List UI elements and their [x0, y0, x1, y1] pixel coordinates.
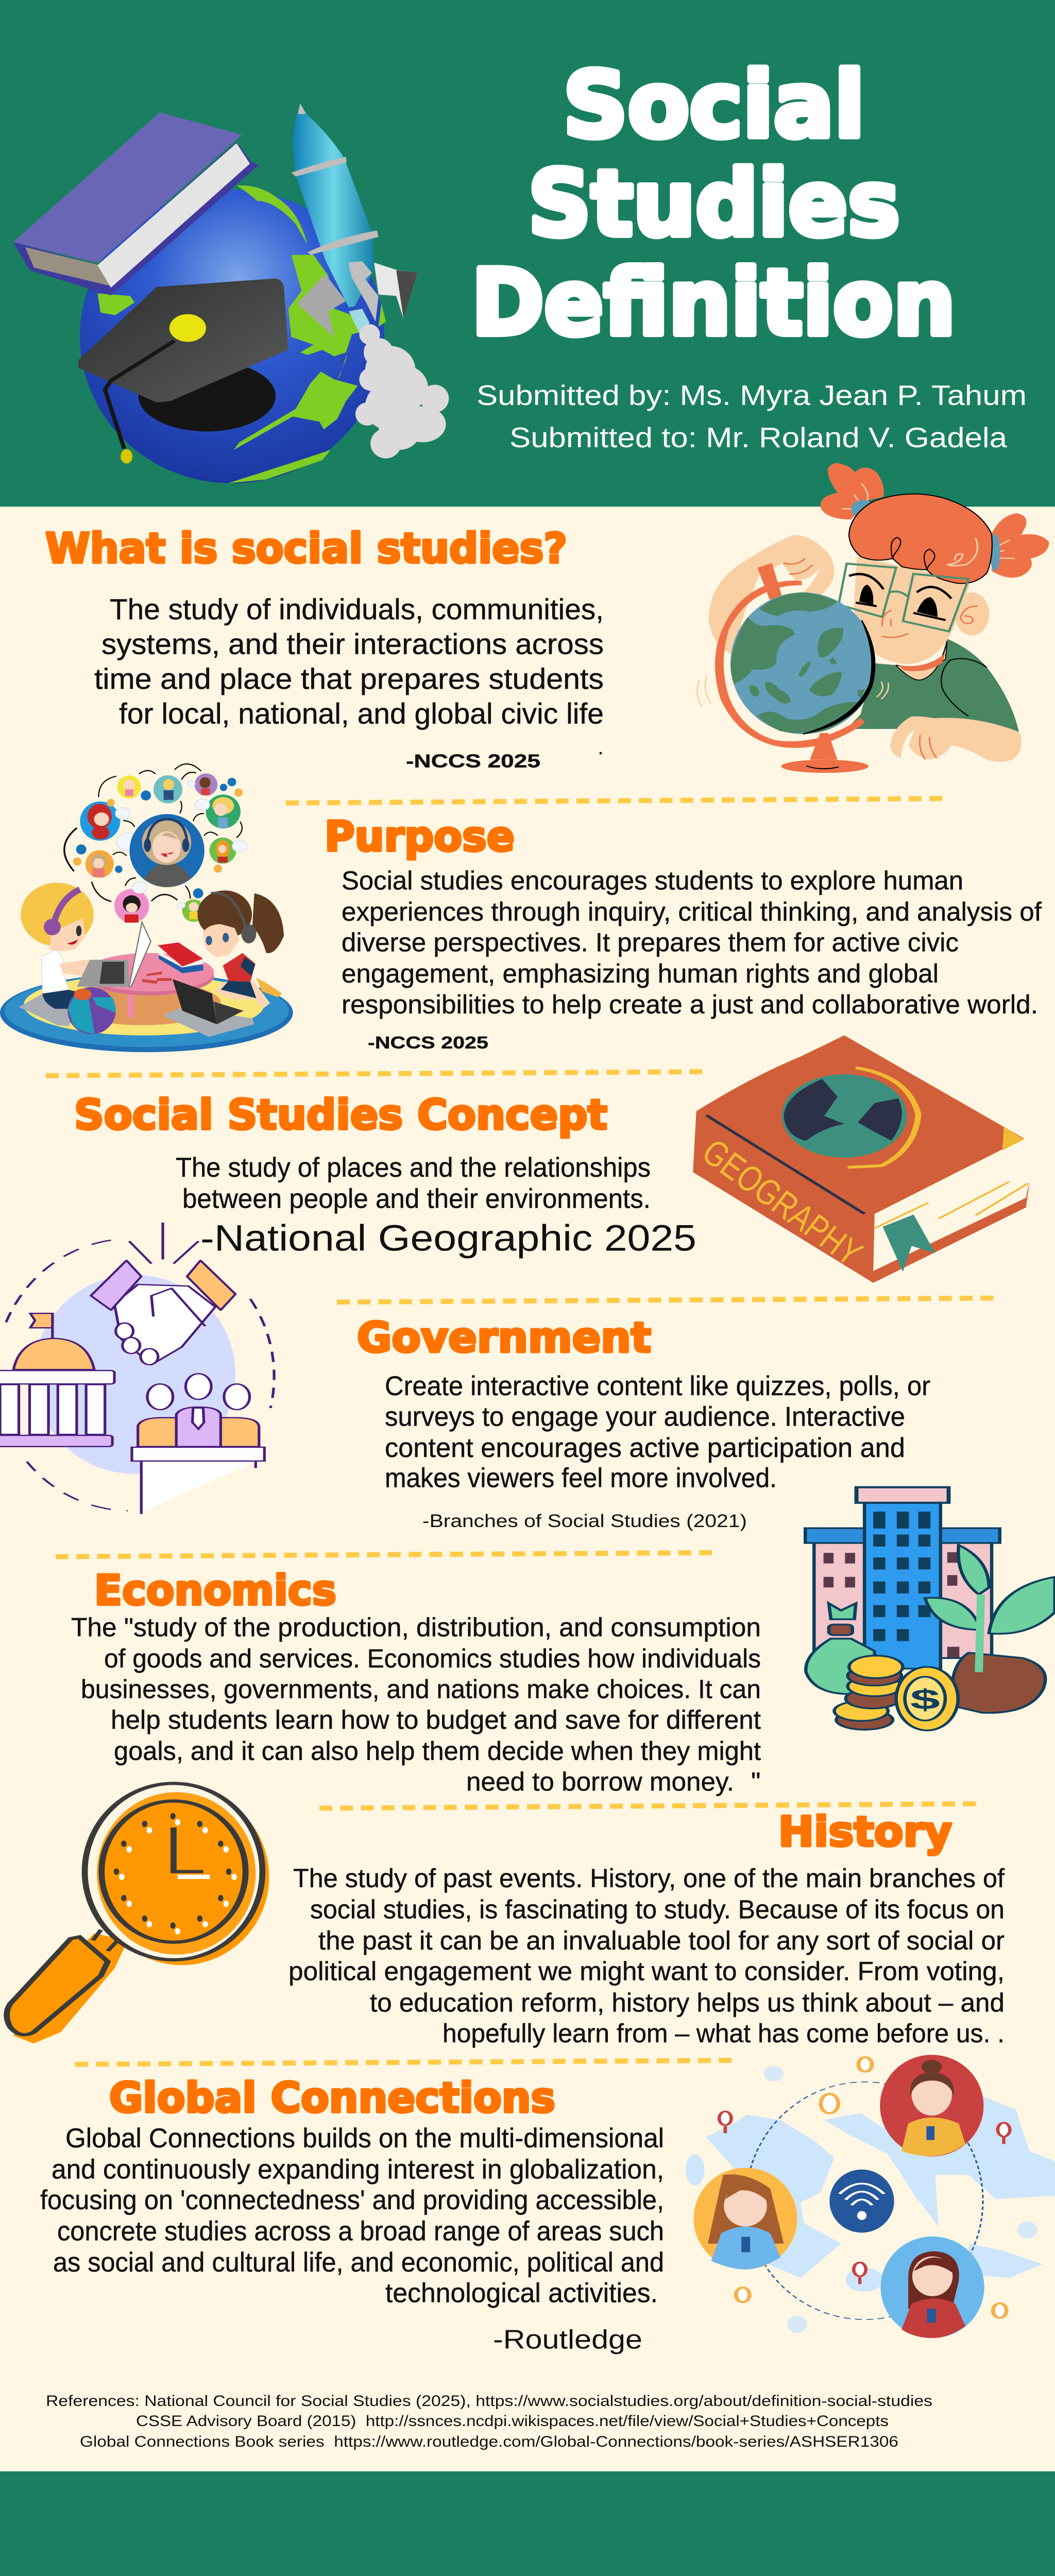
citation: -Routledge: [493, 2325, 642, 2354]
heading: What is social studies?: [45, 525, 567, 573]
mat: [0, 973, 293, 1052]
body text: need to borrow money.: [466, 1767, 734, 1796]
clock hands: [178, 1874, 210, 1880]
dashed ring: [4, 1240, 274, 1511]
body text: businesses, governments, and nations make choices. It can: [81, 1674, 761, 1704]
body text: [342, 866, 1042, 1019]
body text: Social studies encourages students to explore human: [342, 866, 963, 895]
heading: Social Studies Concept: [74, 1091, 607, 1139]
body text: responsibilities to help create a just and collaborative world.: [342, 989, 1038, 1019]
body text: Create interactive content like quizzes, polls, or: [385, 1371, 930, 1401]
illustration: city buildings, money and plant: $: [910, 1684, 940, 1715]
shirt: [847, 638, 1019, 733]
body text: The study of individuals, communities,: [110, 594, 604, 626]
section: what is social studies: [45, 525, 604, 771]
body text: [94, 594, 604, 730]
dashed connection ring: [746, 2082, 983, 2319]
body text: diverse perspectives. It prepares them for active civic: [342, 927, 959, 957]
body text: hopefully learn from – what has come before us. .: [443, 2018, 1005, 2048]
submitted by lines: [477, 380, 1027, 453]
book: [13, 112, 259, 295]
body text: [40, 2124, 664, 2309]
body text: [385, 1371, 930, 1494]
title: [471, 53, 956, 355]
hearts: [736, 2057, 1007, 2318]
globe stand: [715, 581, 865, 748]
money bag: [806, 1603, 875, 1694]
body text: experiences through inquiry, critical thinking, and analysis of: [342, 897, 1042, 926]
title: Studies: [528, 151, 900, 257]
world map: [686, 2066, 1055, 2333]
face: [854, 556, 969, 664]
body text: systems, and their interactions across: [101, 628, 604, 660]
boy: [19, 883, 151, 1026]
body text: and continuously expanding interest in globalization,: [52, 2155, 664, 2184]
body text: time and place that prepares students: [94, 663, 604, 696]
footer band: [0, 2471, 1055, 2576]
heading: History: [778, 1808, 952, 1856]
boy laptop: [77, 960, 129, 987]
section: purpose: [325, 813, 1042, 1053]
body text: surveys to engage your audience. Interactive: [385, 1402, 905, 1432]
section: history: [288, 1808, 1005, 2048]
books on table: [159, 955, 203, 973]
submitted by lines: Submitted to: Mr. Roland V. Gadela: [509, 422, 1007, 453]
references: CSSE Advisory Board (2015) http://ssnces.ncdpi.wikispaces.net/file/view/Social+Studies+Concepts: [136, 2413, 889, 2430]
body text: between people and their environments.: [182, 1184, 651, 1214]
globe ball: [730, 592, 875, 734]
heading: Economics: [94, 1567, 336, 1615]
person: red circle: [880, 2055, 983, 2157]
illustration: globe, book, graduation cap and rocket: [13, 104, 449, 483]
body text: engagement, emphasizing human rights and global: [342, 959, 939, 988]
body text: help students learn how to budget and save for different: [111, 1705, 761, 1734]
hair tufts: [821, 463, 884, 519]
body text: [71, 1612, 761, 1796]
body text: goals, and it can also help them decide when they might: [114, 1736, 761, 1766]
girl: [163, 890, 284, 1037]
body text: technological activities.: [385, 2278, 658, 2309]
illustration: geography book: [693, 1036, 1029, 1283]
body text: The "study of the production, distribution, and consumption: [71, 1612, 761, 1642]
body text: ": [751, 1767, 760, 1796]
body text: [288, 1863, 1005, 2048]
coins: [834, 1655, 958, 1731]
body text: content encourages active participation and: [385, 1433, 905, 1463]
body text: [176, 1153, 651, 1214]
references: Global Connections Book series https://www.routledge.com/Global-Connections/book-series/ASHSER1306: [80, 2433, 898, 2450]
body text: the past it can be an invaluable tool for any sort of social or: [318, 1926, 1005, 1955]
illustration: city buildings, money and plant: [805, 1487, 1055, 1731]
illustration: children video chatting: [0, 764, 293, 1052]
body text: focusing on 'connectedness' and providing accessible,: [40, 2185, 664, 2215]
map pins: [719, 2111, 1010, 2284]
body text: concrete studies across a broad range of areas such: [57, 2216, 664, 2246]
glasses: [839, 564, 968, 632]
heading: Government: [357, 1314, 651, 1362]
citation: -NCCS 2025: [368, 1034, 488, 1053]
section: global connections: [40, 2074, 664, 2354]
graduation cap: [78, 278, 288, 464]
section: social studies concept: [74, 1091, 696, 1259]
illustration: global connections network: [686, 2055, 1055, 2338]
body text: social studies, is fascinating to study. Because of its focus on: [310, 1894, 1005, 1924]
body text: The study of past events. History, one of the main branches of: [293, 1863, 1005, 1893]
rocket: [291, 104, 417, 337]
references: References: National Council for Social Studies (2025), https://www.socialstudies.org/about/definition-social-studies: [46, 2393, 932, 2410]
body text: political engagement we might want to consider. From voting,: [288, 1956, 1005, 1986]
body text: to education reform, history helps us think about – and: [370, 1988, 1005, 2017]
clock ticks: [114, 1813, 231, 1929]
arm: [709, 535, 834, 655]
bookmark: [882, 1214, 935, 1272]
hand: [890, 716, 1022, 762]
book label: GEOGRAPHY: [694, 1131, 870, 1274]
citation: -National Geographic 2025: [200, 1218, 696, 1259]
body text: of goods and services. Economics studies how individuals: [104, 1643, 761, 1673]
plant: [925, 1545, 1055, 1713]
submitted by lines: Submitted by: Ms. Myra Jean P. Tahum: [477, 380, 1027, 411]
body text: The study of places and the relationships: [176, 1153, 651, 1183]
section: economics: [71, 1567, 761, 1796]
title: Social: [563, 53, 865, 158]
title: Definition: [471, 250, 956, 355]
header band: [0, 0, 1055, 506]
references: [46, 2393, 932, 2450]
table: [127, 990, 134, 1018]
citation: -Branches of Social Studies (2021): [422, 1511, 747, 1531]
illustration: magnifying glass with clock: [7, 1783, 269, 2043]
illustration: child hugging a globe: [697, 463, 1049, 773]
section: government: [357, 1314, 930, 1531]
body text: Global Connections builds on the multi-dimensional: [65, 2124, 664, 2154]
hair: [849, 494, 992, 583]
body text: makes viewers feel more involved.: [385, 1463, 777, 1494]
buildings: [805, 1487, 1000, 1669]
handshake: [91, 1260, 235, 1365]
ball: [67, 987, 116, 1035]
globe on cover: [782, 1074, 907, 1158]
heading: Global Connections: [109, 2074, 555, 2122]
wifi badge: [829, 2170, 894, 2233]
capitol: [0, 1313, 114, 1447]
network circles: [64, 764, 247, 923]
heading: Purpose: [325, 813, 515, 861]
rocket smoke: [355, 324, 449, 459]
person: yellow circle: [693, 2168, 797, 2269]
body text: as social and cultural life, and economic, political and: [53, 2248, 664, 2278]
citation: -NCCS 2025: [406, 751, 540, 771]
person: blue circle: [881, 2236, 984, 2338]
people at podium: [132, 1374, 264, 1514]
eyes and brows: [849, 574, 951, 620]
teacher: [129, 814, 205, 887]
body text: for local, national, and global civic life: [119, 698, 604, 730]
illustration: government handshake and capitol: [0, 1223, 274, 1514]
